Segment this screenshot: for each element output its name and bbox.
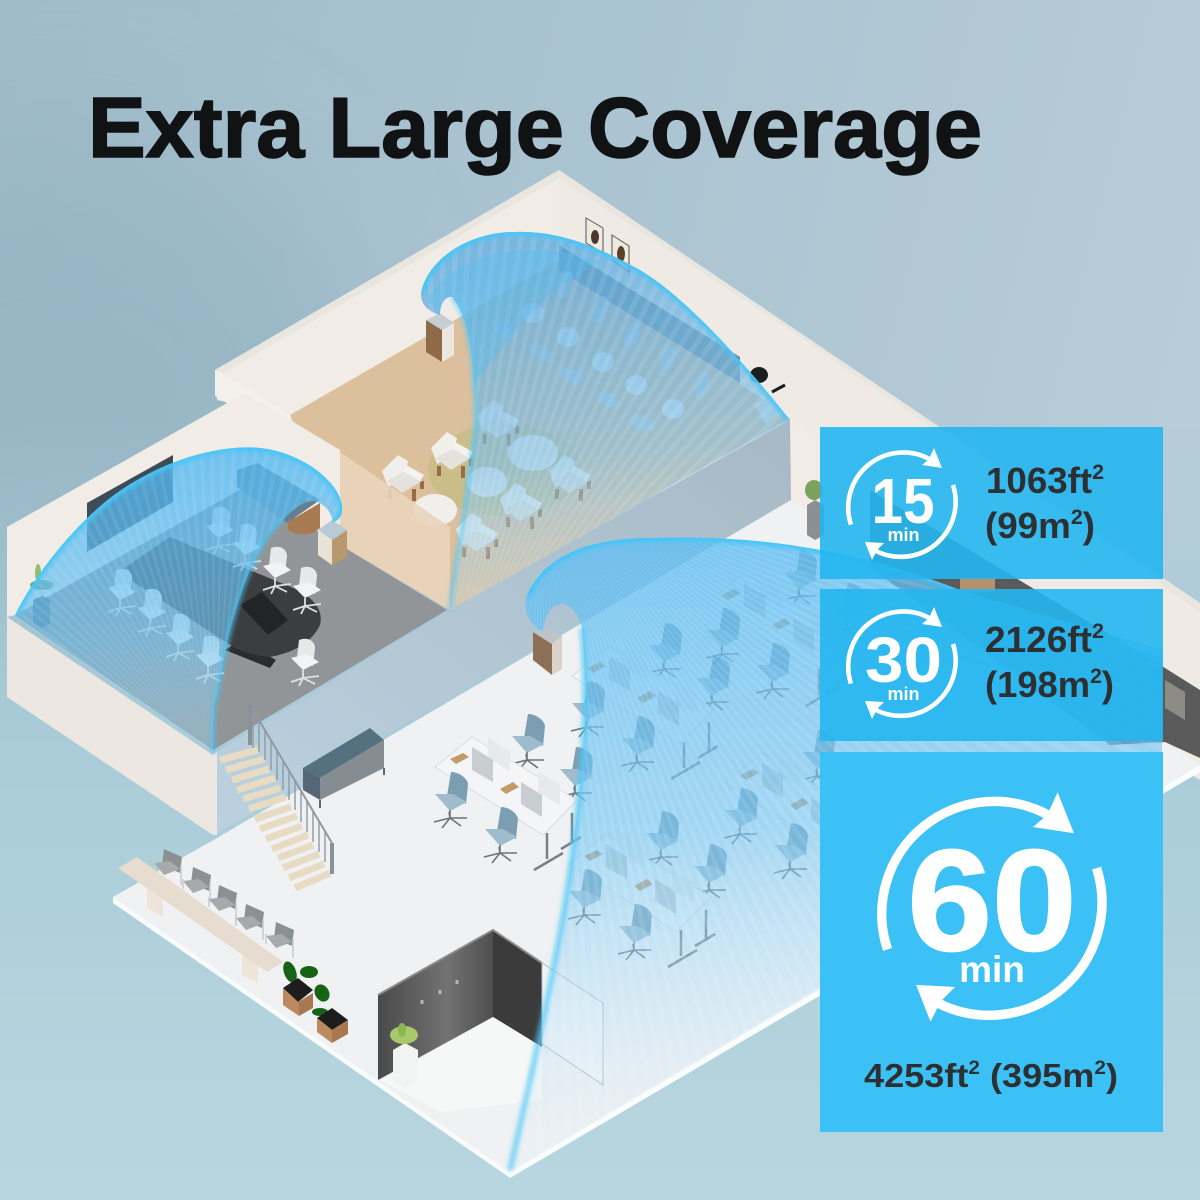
airflow: left room — [15, 447, 342, 754]
conference table — [118, 537, 321, 668]
upper room furniture — [382, 218, 785, 559]
cabinet — [303, 728, 384, 808]
lower floor — [113, 500, 1200, 1178]
console — [237, 463, 320, 523]
area: 4253 sq ft, 395 sq m: ) — [1106, 1057, 1118, 1094]
coat hooks — [422, 980, 457, 1004]
area: 4253 sq ft, 395 sq m: (395m — [980, 1057, 1094, 1094]
panel: 30 minutes — [820, 589, 1163, 741]
back shelving — [870, 490, 1200, 758]
icon: 60 min cycle: 60 — [908, 820, 1076, 981]
reception bench — [118, 849, 294, 983]
area: 2126 sq ft: 2 — [1092, 620, 1104, 643]
right side plant — [805, 480, 824, 540]
planters — [281, 960, 348, 1043]
area: 1063 sq ft: 2 — [1092, 461, 1104, 484]
treads — [220, 750, 330, 888]
area: 198 sq m: (198m — [985, 664, 1089, 705]
air purifier: upper room — [426, 313, 454, 362]
cafe chairs — [490, 269, 713, 435]
area: 2126 sq ft: 2126ft — [985, 619, 1089, 660]
railing — [250, 705, 332, 874]
wall pictures — [586, 218, 629, 272]
panel: 15 minutes — [820, 427, 1163, 579]
lounge rug — [428, 424, 580, 516]
glass door — [542, 963, 603, 1085]
icon: 60 min cycle — [882, 792, 1102, 1022]
left room carpet floor — [15, 487, 447, 750]
area: 4253 sq ft, 395 sq m: 2 — [968, 1058, 980, 1079]
dark alcove — [378, 930, 603, 1112]
upper room outer walls — [215, 170, 1200, 780]
left room furniture — [30, 455, 321, 686]
credenza — [559, 245, 740, 383]
area: 4253 sq ft, 395 sq m: 2 — [1094, 1058, 1106, 1079]
desk clusters — [434, 550, 883, 967]
lounge armchairs — [382, 400, 591, 559]
mezzanine front wall — [217, 420, 791, 833]
airflow: upper room — [420, 232, 790, 612]
area: 99 sq m: ) — [1083, 505, 1095, 546]
cafe tables — [522, 303, 684, 419]
airflow: main floor — [505, 538, 1162, 1173]
meeting chairs — [108, 507, 321, 686]
left room walls — [7, 393, 340, 835]
dark plant — [750, 367, 785, 424]
area: 99 sq m: (99m — [985, 505, 1069, 546]
area: 198 sq m: 2 — [1090, 665, 1102, 688]
waiting chairs — [154, 849, 294, 958]
corner plant — [30, 564, 54, 628]
icon: 30 min cycle: 30 — [865, 624, 942, 696]
title: Extra Large Coverage — [88, 81, 982, 176]
icon: 30 min cycle: min — [887, 684, 920, 704]
air purifier: left room — [318, 520, 347, 565]
area: 1063 sq ft: 1063ft — [986, 460, 1090, 501]
glass partition — [340, 452, 450, 610]
panel: 60 minutes — [820, 752, 1163, 1132]
icon: 15 min cycle: min — [887, 525, 920, 545]
white plant stand — [390, 1023, 418, 1088]
icon: 60 min cycle: min — [959, 949, 1025, 990]
area: 99 sq m: 2 — [1071, 506, 1083, 529]
area: 198 sq m: ) — [1102, 664, 1114, 705]
lounge tables — [413, 435, 558, 526]
staircase — [220, 705, 332, 888]
upper room wood floor — [290, 260, 790, 610]
icon: 15 min cycle — [848, 448, 956, 560]
icon: 30 min cycle — [848, 607, 956, 719]
air purifier: main floor — [533, 628, 562, 675]
wall screen — [87, 455, 173, 552]
icon: 15 min cycle: 15 — [872, 465, 934, 537]
area: 4253 sq ft, 395 sq m: 4253ft — [864, 1057, 959, 1094]
wood reception desk — [288, 503, 320, 535]
